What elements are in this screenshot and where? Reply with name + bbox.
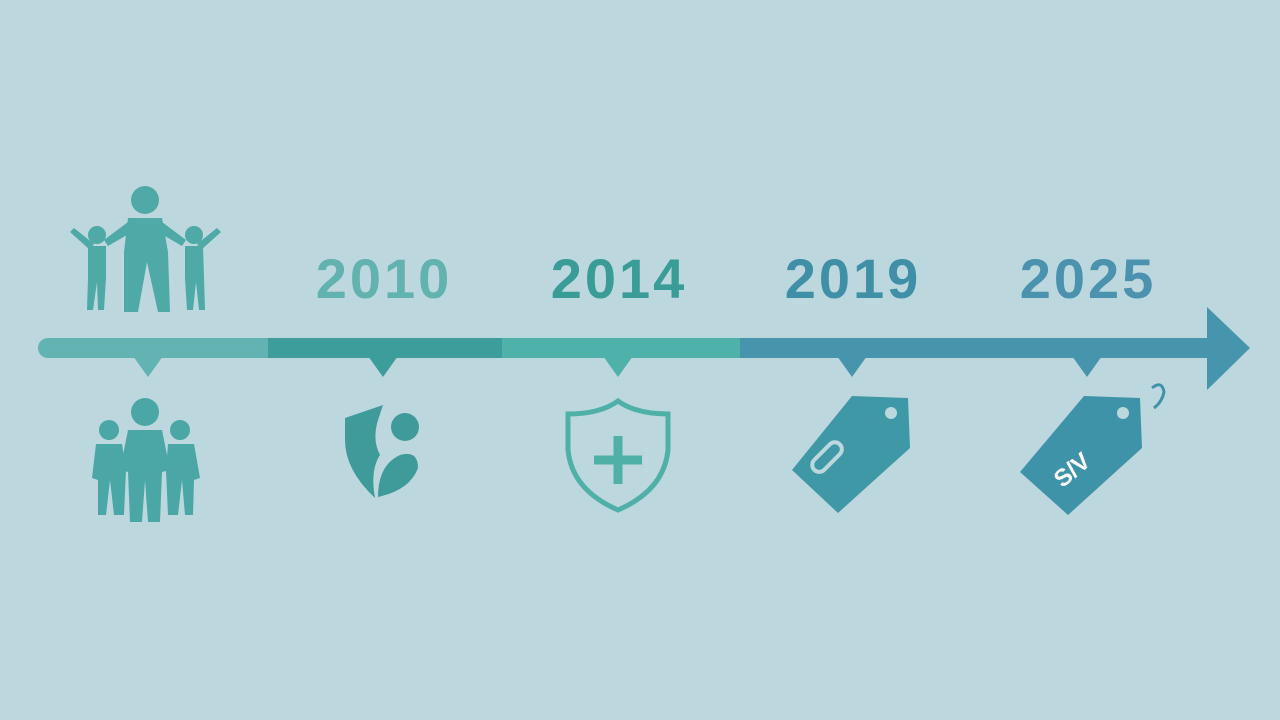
icon: shield with person — [345, 405, 419, 498]
icon: shield with plus — [568, 401, 668, 510]
icon: family with raised arms — [70, 186, 221, 312]
icon: price tag with symbol: S/V — [1049, 448, 1096, 493]
icon: group of people — [92, 398, 200, 522]
year labels: 2019 — [785, 247, 921, 310]
icon: price tag with zero — [792, 396, 910, 513]
year labels — [316, 247, 1156, 310]
icon: price tag with symbol — [1020, 385, 1164, 515]
year labels: 2014 — [551, 247, 687, 310]
timeline arrow — [38, 307, 1250, 390]
year labels: 2025 — [1020, 247, 1156, 310]
year labels: 2010 — [316, 247, 452, 310]
